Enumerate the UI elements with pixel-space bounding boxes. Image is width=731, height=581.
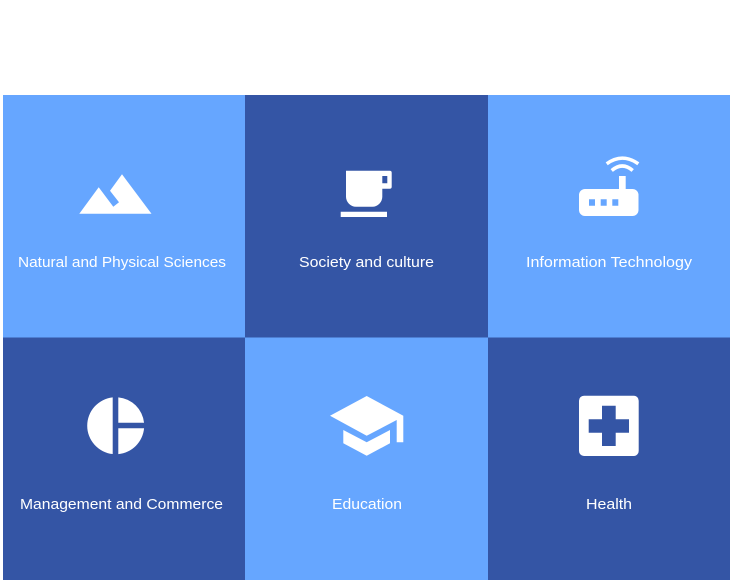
panel: Natural and Physical Sciences — [3, 95, 245, 338]
label: Society and culture: Society and culture — [299, 254, 434, 271]
icon: pie chart — [87, 397, 144, 454]
label: Natural and Physical Sciences: Natural and Physical Sciences — [18, 254, 226, 271]
panel: Health — [488, 338, 730, 580]
label: Information Technology: Information Technology — [526, 254, 693, 271]
panel: Management and Commerce — [3, 338, 245, 580]
panel: Education — [245, 338, 488, 580]
panel: Society and culture — [245, 95, 488, 338]
icon: wifi router — [579, 158, 638, 216]
icon: mountains — [79, 174, 152, 214]
icon: coffee cup — [341, 171, 392, 217]
icon: medical cross — [579, 396, 639, 456]
label: Management and Commerce: Management and Commerce — [20, 496, 223, 513]
label: Education: Education — [332, 496, 402, 513]
label: Health: Health — [586, 496, 632, 513]
panel: Information Technology — [488, 95, 730, 338]
icon: graduation cap — [330, 396, 403, 456]
